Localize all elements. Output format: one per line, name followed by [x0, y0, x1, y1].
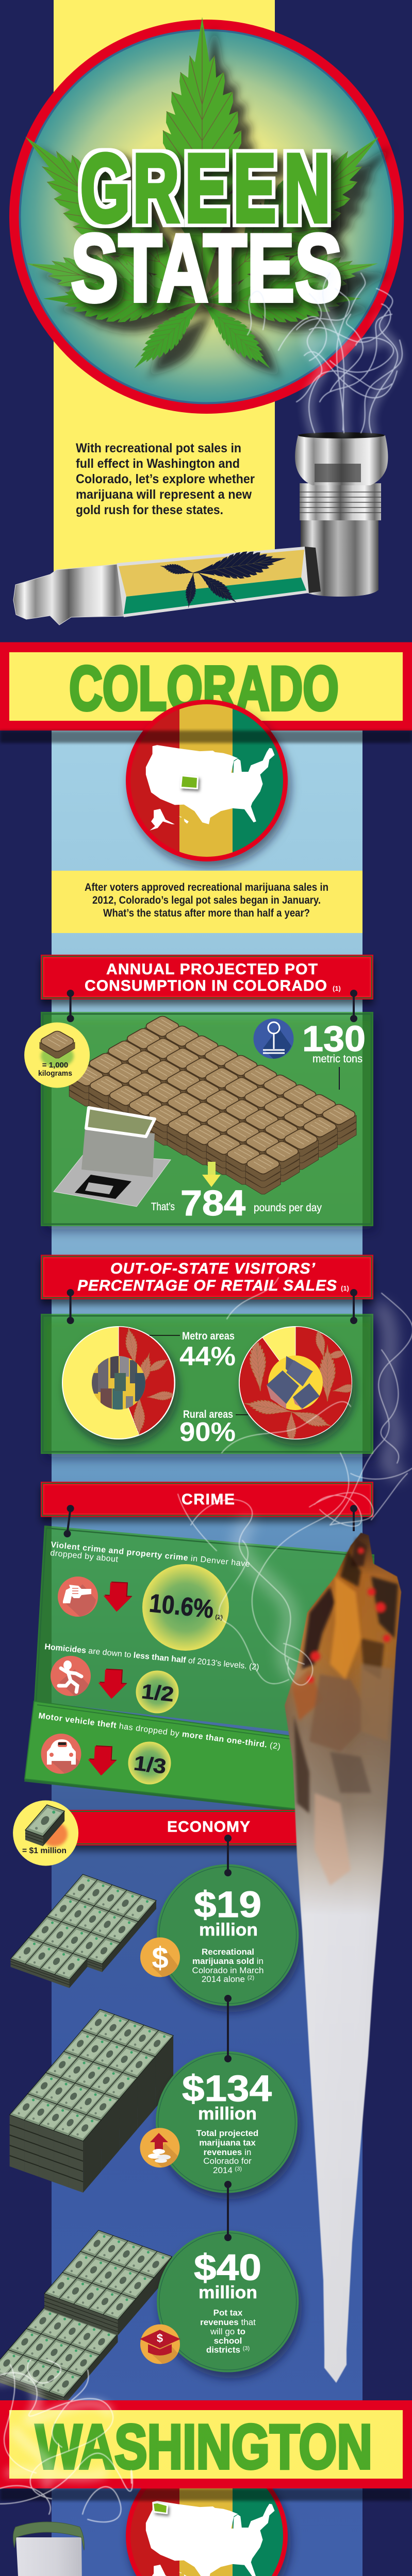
stat: 784 pounds per day: 784 [180, 1183, 245, 1223]
stat circle: $19 million: million [199, 1920, 258, 1940]
stat: 130 metric tons: metric tons [312, 1053, 362, 1065]
stat circle: $19 million: Colorado in March [192, 1965, 263, 1975]
stat circle: $134 million: million [198, 2104, 257, 2124]
stat: 1/3: 1/3 [133, 1752, 168, 1778]
stat circle: $19 million: $19 [194, 1885, 261, 1925]
stat: 1/3 [128, 1741, 171, 1785]
hangers [67, 1289, 357, 1324]
icon: graduation cap: $ [157, 2332, 163, 2345]
light column [52, 731, 362, 2576]
stat circle: $40 million: million [199, 2283, 257, 2302]
burnt tip [291, 1538, 398, 1886]
washington marker [152, 2502, 168, 2514]
donut chart: metro areas 44% [62, 1325, 178, 1439]
callout: $1 million [13, 1800, 78, 1866]
stat circle: $40 million: districts [206, 2345, 240, 2354]
icon: dollar [140, 1937, 180, 1977]
cannabis leaf [2, 17, 402, 378]
stat circle: $134 million: Colorado for [203, 2156, 252, 2166]
text: motor vehicle theft: Motor vehicle theft has dropped by more than one-third. (2) [38, 1711, 281, 1751]
title emblem [2, 17, 404, 414]
banner: colorado [0, 642, 412, 731]
hangers [64, 1505, 357, 1537]
stat circle: $134 million: $134 [182, 2069, 272, 2109]
banner: washington [0, 2400, 412, 2576]
icon: stolen car [41, 1734, 81, 1774]
panel: consumption [41, 1012, 373, 1226]
intro text: 2012, Colorado’s legal pot sales began in January. [92, 894, 321, 906]
stat circle: $134 million: (3) [235, 2166, 242, 2172]
bong lid [13, 2522, 84, 2550]
stat: 10.6%: (2) [215, 1613, 223, 1621]
hangers [67, 990, 357, 1022]
stat circle: $40 million: (3) [243, 2345, 250, 2351]
heading: annual consumption: (1) [333, 985, 341, 992]
smoke: bong [0, 2360, 133, 2522]
arrow: down [97, 1668, 128, 1700]
stat circle: $40 million: $40 [194, 2247, 261, 2289]
stat circle: $134 million: marijuana tax [199, 2138, 256, 2147]
title: green: GREEN [80, 134, 330, 242]
arrow: down [103, 1581, 133, 1613]
panel: crime tilted sheet 1 [34, 1526, 374, 1741]
labels: metro and rural: Metro areas [182, 1330, 235, 1342]
stat: 1/2: 1/2 [140, 1680, 175, 1706]
intro text [76, 441, 255, 517]
icon: metal pipe [13, 432, 388, 625]
yellow intro column [54, 0, 275, 577]
text: homicides: Homicides are down to less than half of 2013’s levels. (2) [44, 1642, 259, 1672]
text: violent crime: Violent crime and property crime in Denver have [51, 1540, 251, 1569]
heading: out-of-state visitors: OUT-OF-STATE VISITORS’ [110, 1260, 316, 1277]
hangers: economy chain [224, 1835, 232, 2241]
pipe mouthpiece [13, 564, 124, 625]
money stack: 19 million [10, 1874, 156, 1988]
stat: 784 pounds per day: pounds per day [254, 1202, 322, 1214]
arrow [202, 1162, 221, 1187]
arrow: down [87, 1745, 118, 1776]
icon: gun [58, 1577, 98, 1617]
callout: 1000 kilograms [24, 1022, 90, 1088]
pipe shaft [117, 545, 321, 617]
stat circle: $19 million [157, 1864, 299, 2006]
smoke: pipe [248, 273, 402, 433]
colorado intro band [52, 871, 362, 933]
stat circle: $19 million: 2014 alone [202, 1974, 245, 1984]
stat circle: $134 million [156, 2052, 298, 2193]
heading: out-of-state visitors [41, 1255, 373, 1299]
icon: bag on scale [54, 1108, 171, 1207]
callout: 1000 kilograms: kilograms [38, 1069, 72, 1078]
colorado marker [180, 775, 199, 789]
badge: colorado map [126, 700, 289, 865]
stat circle: $134 million: revenues in [204, 2147, 251, 2157]
stat circle: $19 million: marijuana sold in [192, 1956, 263, 1966]
stat circle: $134 million: 2014 [213, 2165, 233, 2175]
intro text [85, 882, 328, 919]
bong tube [16, 2537, 84, 2576]
stat circle: $19 million: Recreational [202, 1947, 254, 1957]
intro text: full effect in Washington and [76, 456, 240, 471]
heading: economy: ECONOMY [167, 1819, 250, 1835]
pipe stem [295, 432, 388, 597]
callout: 1000 kilograms: = 1,000 [42, 1061, 68, 1070]
usa map [146, 2501, 275, 2576]
stat: 130 metric tons: 130 [302, 1019, 366, 1059]
callout: $1 million: = $1 million [22, 1846, 67, 1855]
stat: 10.6%: 10.6% [148, 1588, 215, 1624]
houses [267, 1355, 323, 1410]
icon: bong [13, 2522, 192, 2576]
heading: out-of-state visitors: (1) [341, 1284, 349, 1292]
intro text: What’s the status after more than half a year? [103, 907, 310, 919]
stat circle: $40 million: Pot tax [213, 2308, 243, 2317]
icon: burning joint [285, 1533, 401, 2383]
labels: metro and rural: Rural areas [183, 1409, 233, 1420]
money stack: 40 million [0, 2230, 172, 2405]
stat circle: $40 million: school [214, 2336, 242, 2346]
panel: crime tilted sheet 2 [24, 1701, 320, 1814]
stat circle: $40 million: will go to [210, 2327, 245, 2336]
stat: 130 metric tons [302, 1019, 366, 1090]
display [75, 1175, 131, 1199]
city photo [92, 1355, 145, 1410]
labels: metro and rural [150, 1330, 248, 1447]
stat circle: $134 million: Total projected [196, 2128, 258, 2138]
money stack: 134 million [10, 2009, 173, 2193]
banner shadow [0, 731, 412, 743]
heading: crime [41, 1482, 373, 1517]
text: violent crime: dropped by about [50, 1549, 119, 1564]
labels: metro and rural: 44% [179, 1342, 236, 1371]
intro text: marijuana will represent a new [76, 487, 252, 502]
scale plate [54, 1154, 171, 1207]
smoke: joint [178, 1278, 412, 1685]
stat: 784 pounds per day [151, 1183, 322, 1223]
icon: brick pile [69, 1016, 356, 1194]
heading: annual consumption: ANNUAL PROJECTED POT [106, 961, 318, 978]
stat: 784 pounds per day: That’s [151, 1201, 175, 1213]
icon: dollar: $ [152, 1941, 169, 1975]
heading: annual consumption: CONSUMPTION IN COLORADO [85, 977, 327, 994]
stat: 1/2 [136, 1670, 178, 1714]
stat circle: $40 million [157, 2231, 299, 2372]
icon: graduation cap [140, 2325, 180, 2364]
stat circle: $19 million: (2) [248, 1975, 254, 1981]
intro text: After voters approved recreational marijuana sales in [85, 882, 328, 893]
heading: crime: CRIME [182, 1491, 235, 1508]
intro text: With recreational pot sales in [76, 441, 241, 455]
intro text: gold rush for these states. [76, 503, 223, 517]
heading: economy [62, 1810, 373, 1845]
icon: scale [254, 1019, 294, 1059]
donut chart: rural areas 90% [239, 1327, 361, 1446]
badge: washington map [123, 2488, 297, 2576]
intro text: Colorado, let’s explore whether [76, 472, 255, 486]
panel: retail sales [41, 1314, 373, 1454]
labels: metro and rural: 90% [179, 1417, 236, 1447]
stat circle: $40 million: revenues that [200, 2317, 256, 2327]
usa map [146, 745, 275, 831]
heading: annual consumption [41, 955, 373, 999]
icon: coins and arrow [140, 2128, 179, 2167]
emblem circle [9, 20, 404, 414]
icon: chalk figure [51, 1656, 91, 1696]
bag [81, 1128, 155, 1177]
stat: 10.6% [142, 1564, 229, 1651]
heading: out-of-state visitors: PERCENTAGE OF RETAIL SALES [77, 1277, 337, 1294]
